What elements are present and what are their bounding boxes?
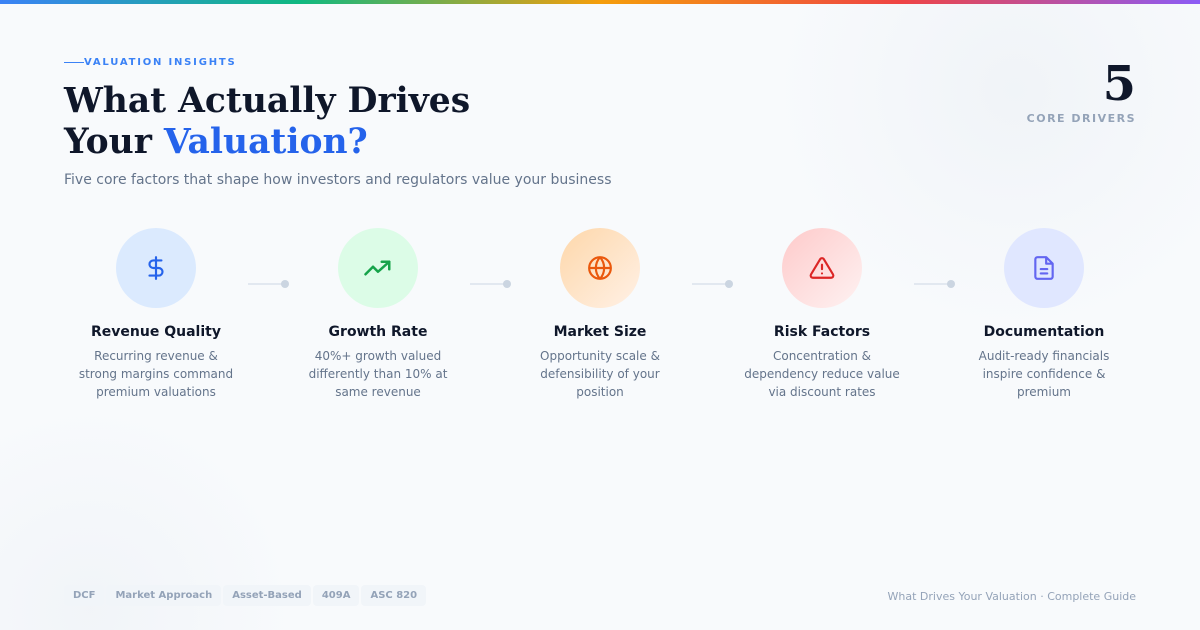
card: risk factors: via discount rates <box>768 385 876 399</box>
card: market size <box>540 228 660 399</box>
card: risk factors <box>744 228 900 399</box>
card: risk factors: dependency reduce value <box>744 367 900 381</box>
stat: 5 core drivers: 5 <box>1103 56 1136 112</box>
footer: What Drives Your Valuation · Complete Guide <box>888 590 1136 603</box>
icon: document <box>1004 228 1084 308</box>
card: documentation: inspire confidence & <box>983 367 1105 381</box>
eyebrow: VALUATION INSIGHTS <box>84 57 236 68</box>
card: market size: Market Size <box>554 324 646 340</box>
card: growth rate: 40%+ growth valued <box>315 349 441 363</box>
connector <box>248 283 286 285</box>
card: risk factors: Concentration & <box>773 349 871 363</box>
card: growth rate <box>309 228 448 399</box>
icon: trend <box>338 228 418 308</box>
method tags: Asset-Based <box>232 590 302 601</box>
card: revenue quality: Revenue Quality <box>91 324 221 340</box>
title: Your Valuation? <box>64 122 368 162</box>
card: documentation: Audit-ready financials <box>979 349 1109 363</box>
card: market size: Opportunity scale & <box>540 349 660 363</box>
method tags: DCF <box>73 590 95 601</box>
card: market size: defensibility of your <box>540 367 660 381</box>
card: documentation: premium <box>1017 385 1071 399</box>
card: documentation <box>978 228 1109 399</box>
card: market size: position <box>576 385 624 399</box>
stat: 5 core drivers: CORE DRIVERS <box>1027 112 1136 125</box>
card: growth rate: differently than 10% at <box>309 367 447 381</box>
card: revenue quality <box>79 228 233 399</box>
icon: warning <box>782 228 862 308</box>
subtitle: Five core factors that shape how investors and regulators value your business <box>64 172 612 188</box>
method tags: ASC 820 <box>370 590 417 601</box>
card: revenue quality: Recurring revenue & <box>94 349 218 363</box>
stat: 5 core drivers <box>1027 56 1136 125</box>
title: What Actually Drives <box>64 81 470 121</box>
connector <box>470 283 508 285</box>
card: documentation: Documentation <box>984 324 1104 340</box>
icon: globe <box>560 228 640 308</box>
card: revenue quality: premium valuations <box>96 385 216 399</box>
connector <box>692 283 730 285</box>
card: risk factors: Risk Factors <box>774 324 870 340</box>
card: revenue quality: strong margins command <box>79 367 233 381</box>
connector <box>914 283 952 285</box>
method tags: Market Approach <box>115 590 212 601</box>
card: growth rate: Growth Rate <box>329 324 427 340</box>
method tags: 409A <box>322 590 350 601</box>
card: growth rate: same revenue <box>335 385 421 399</box>
method tags <box>73 590 417 601</box>
icon: dollar <box>116 228 196 308</box>
title <box>64 81 470 162</box>
